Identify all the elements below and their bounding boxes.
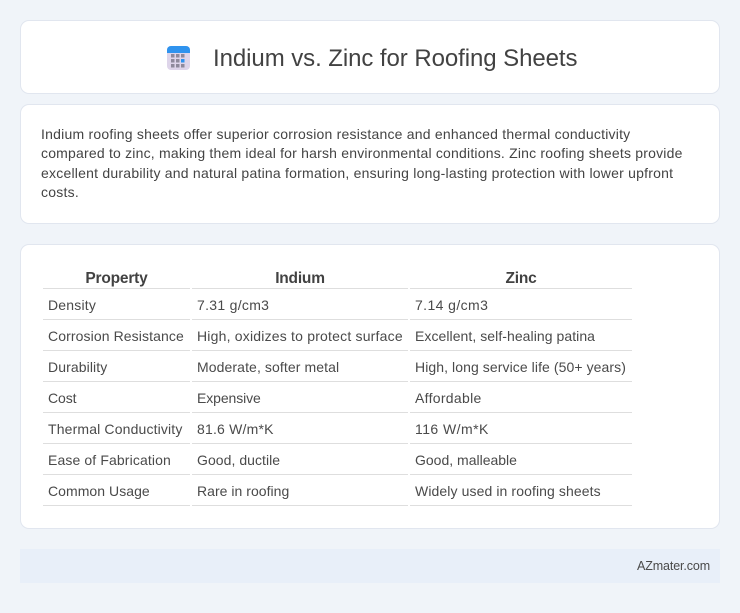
row: ease of fabrication [48,452,517,468]
panel: summary card [20,104,720,224]
row: common usage: Widely used in roofing sheets [415,483,601,499]
row: durability: Durability [48,359,107,375]
row: corrosion resistance: Corrosion Resistance [48,328,184,344]
comparison table header: Zinc [505,270,537,287]
row: durability: High, long service life (50+ years) [415,359,626,375]
row: corrosion resistance: Excellent, self-healing patina [415,328,595,344]
text block: summary: compared to zinc, making them ideal for harsh environmental conditions. Zinc roofing sheets provide [41,145,683,161]
row: corrosion resistance: High, oxidizes to protect surface [197,328,403,344]
row: density [48,297,488,313]
text block: summary: excellent durability and natural patina formation, ensuring long-lasting protection with lower upfront [41,165,673,181]
comparison table header [85,270,537,287]
comparison table header: Property [85,270,148,287]
title: Indium vs. Zinc for Roofing Sheets [213,45,577,72]
row: cost [48,390,482,406]
row: common usage: Common Usage [48,483,150,499]
row: density: 7.14 g/cm3 [415,297,488,313]
footer credit: AZmater.com [637,559,710,573]
text block: summary: Indium roofing sheets offer superior corrosion resistance and enhanced thermal conductivity [41,126,630,142]
footer bar [20,549,720,583]
icon: calendar [167,46,190,70]
comparison table header: Indium [275,270,325,287]
row: durability: Moderate, softer metal [197,359,339,375]
row: cost: Cost [48,390,76,406]
row: common usage [48,483,601,499]
row: thermal conductivity: Thermal Conductivity [48,421,182,437]
row: density: Density [48,297,96,313]
row: durability [48,359,626,375]
row: cost: Affordable [415,390,482,406]
row: ease of fabrication: Ease of Fabrication [48,452,171,468]
row: cost: Expensive [197,390,261,406]
row: common usage: Rare in roofing [197,483,289,499]
row: density: 7.31 g/cm3 [197,297,269,313]
row: thermal conductivity: 116 W/m*K [415,421,489,437]
panel: comparison table card [20,244,720,529]
text block: summary [41,126,683,200]
row: thermal conductivity [48,421,489,437]
row: ease of fabrication: Good, ductile [197,452,280,468]
row: corrosion resistance [48,328,595,344]
row: ease of fabrication: Good, malleable [415,452,517,468]
panel: title card [20,20,720,94]
row: thermal conductivity: 81.6 W/m*K [197,421,274,437]
text block: summary: costs. [41,184,79,200]
